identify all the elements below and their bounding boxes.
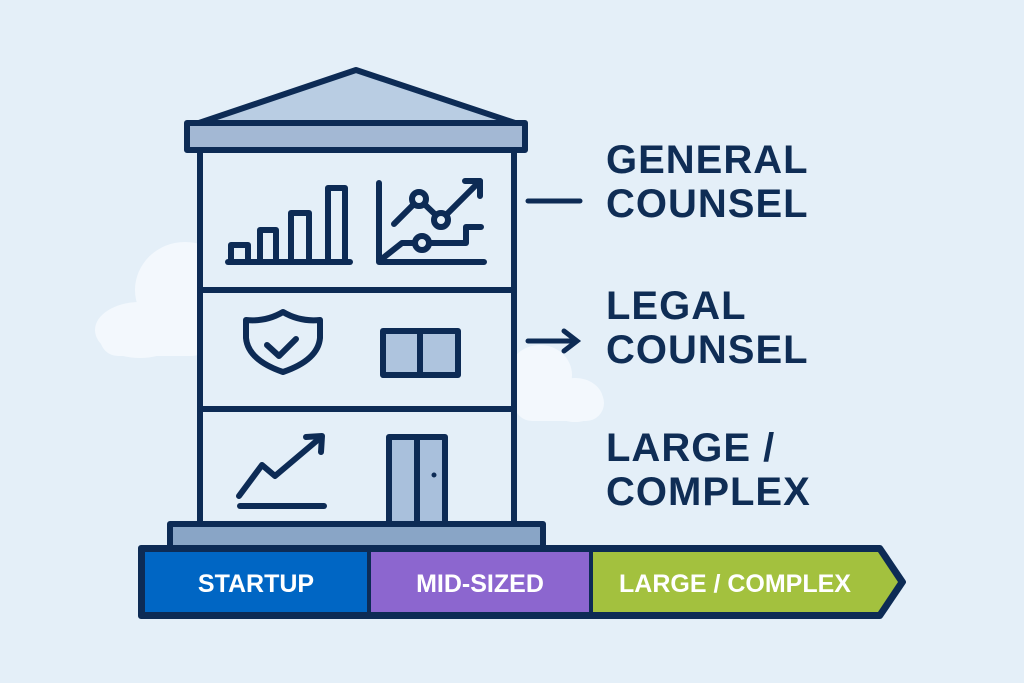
connector: dash: [528, 198, 580, 204]
roof: [187, 70, 525, 150]
label: legal counsel: COUNSEL: [606, 328, 809, 372]
label: large / complex: [606, 426, 811, 514]
segment: startup: [145, 552, 367, 612]
label: general counsel: GENERAL: [606, 138, 809, 182]
cloud: right: [508, 345, 604, 422]
segment: startup: STARTUP: [198, 570, 314, 598]
walls and floors: [200, 150, 514, 524]
plinth: [170, 524, 543, 548]
icon: shield with check: [246, 312, 320, 372]
label: general counsel: [606, 138, 809, 226]
segment: large / complex: LARGE / COMPLEX: [619, 570, 851, 598]
label: large / complex: LARGE /: [606, 426, 775, 470]
label: general counsel: COUNSEL: [606, 182, 809, 226]
segment: mid-sized: MID-SIZED: [416, 570, 544, 598]
label: legal counsel: LEGAL: [606, 284, 747, 328]
door: [389, 437, 445, 524]
label: legal counsel: [606, 284, 809, 372]
timeline bar: [141, 548, 903, 616]
cloud: left: [95, 242, 235, 358]
segment: large / complex: [593, 552, 898, 612]
icon: trend arrow: [239, 436, 324, 506]
segment: mid-sized: [371, 552, 589, 612]
icon: line chart: [379, 181, 484, 262]
icon: window: [383, 331, 458, 375]
building: [170, 70, 543, 548]
label: large / complex: COMPLEX: [606, 470, 811, 514]
connector: arrow: [528, 331, 577, 351]
icon: bar chart: [228, 188, 350, 262]
